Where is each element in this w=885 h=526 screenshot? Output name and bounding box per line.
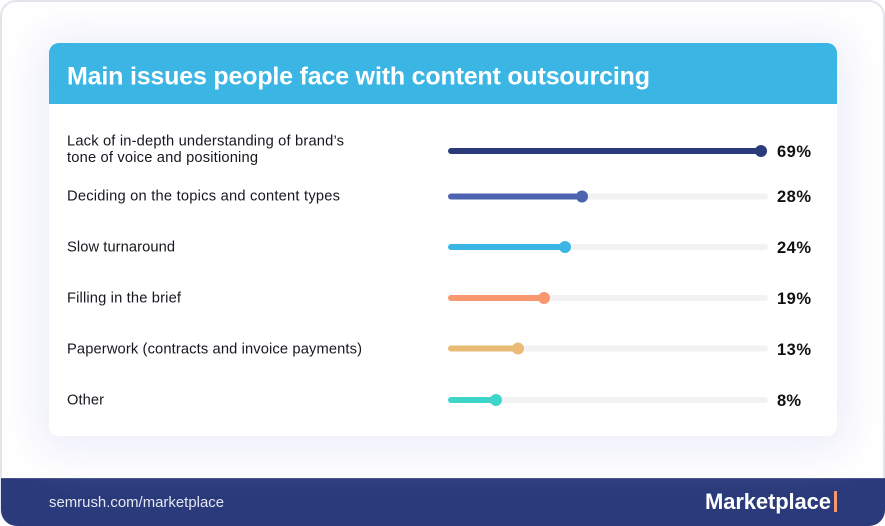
row 2 bar: [448, 190, 768, 202]
row 5 bar: [448, 342, 768, 354]
logo cursor: [834, 491, 837, 512]
footer logo: Marketplace: Marketplace: [705, 489, 831, 514]
row 3 bar: [448, 241, 768, 253]
row 3: turnaround 24%: [67, 239, 811, 257]
header: title band: [49, 43, 837, 104]
row 5: paperwork 13%: [67, 341, 811, 359]
footer url: semrush.com/marketplace: [49, 495, 224, 511]
row 1 label: [67, 134, 344, 166]
row 2 value: 28%: [777, 188, 811, 206]
row 4 value: 19%: [777, 290, 811, 308]
title: Main issues people face with content outsourcing: [67, 62, 650, 90]
row 5 value: 13%: [777, 341, 811, 359]
footer band: [1, 478, 885, 526]
row 1 label: tone of voice and positioning: [67, 150, 258, 166]
row 4 bar: [448, 292, 768, 304]
row 1 label: Lack of in-depth understanding of brand’s: [67, 134, 344, 150]
row 2: topics 28%: [67, 188, 811, 206]
row 6 bar: [448, 394, 768, 406]
row 4: brief 19%: [67, 290, 811, 308]
card panel background: [49, 43, 837, 436]
row 4 label: Filling in the brief: [67, 290, 182, 306]
row 6 value: 8%: [777, 392, 801, 410]
row 1 bar: [448, 145, 768, 157]
row 6 label: Other: [67, 392, 104, 408]
row 2 label: Deciding on the topics and content types: [67, 188, 340, 204]
row 1: brand tone 69%: [67, 134, 811, 166]
row 5 label: Paperwork (contracts and invoice payments): [67, 342, 362, 358]
row 6: other 8%: [67, 392, 801, 410]
row 3 label: Slow turnaround: [67, 240, 175, 256]
row 3 value: 24%: [777, 239, 811, 257]
row 1 value: 69%: [777, 143, 811, 161]
